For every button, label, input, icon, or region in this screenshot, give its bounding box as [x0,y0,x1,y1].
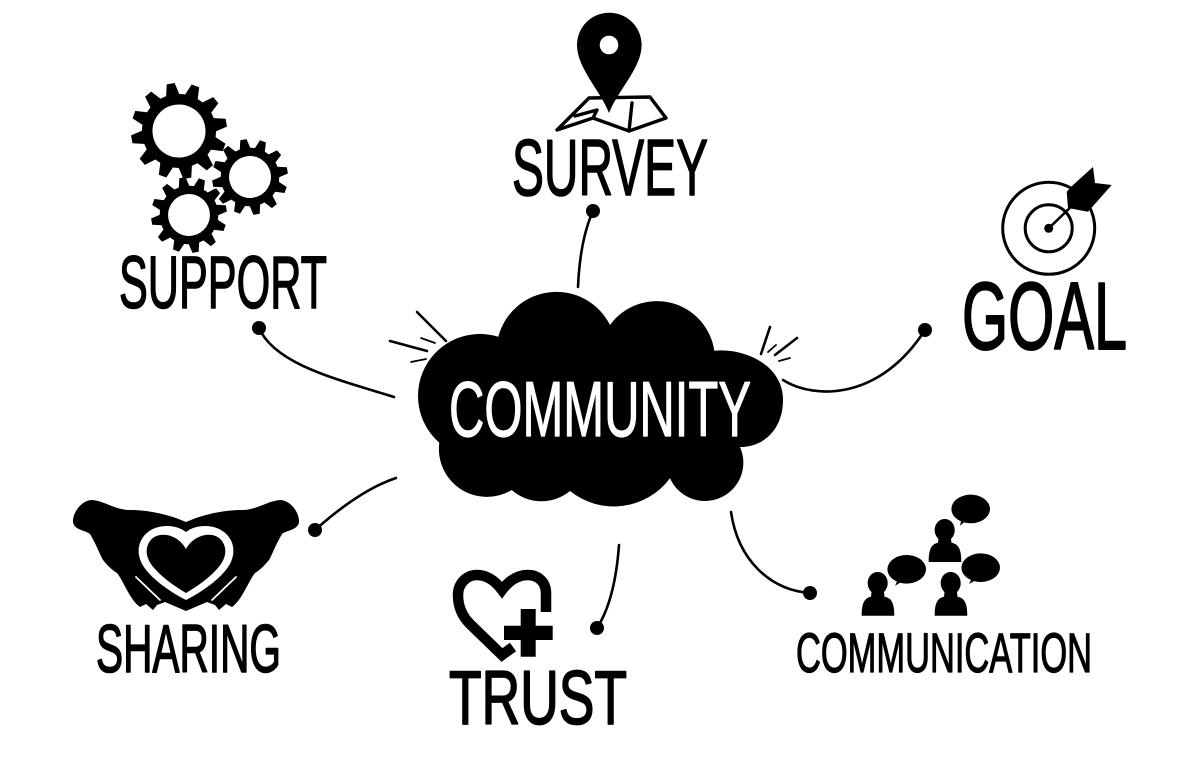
person: right [935,572,967,616]
title: community: COMMUNITY [449,365,751,453]
label: trust: TRUST [449,656,627,741]
rays: right [761,327,797,361]
rays: left [390,312,446,362]
person: left [862,572,894,616]
cloud shape [418,292,783,506]
icon: target [1003,167,1112,274]
gear: large [123,75,235,187]
label: survey: SURVEY [512,123,708,212]
speech bubble: top [951,495,990,526]
node: survey [512,13,708,287]
gear: right [206,133,294,221]
person: top [929,519,961,562]
heart outline [458,575,546,655]
finger slits [136,577,236,600]
node: trust [449,545,627,741]
connector: support [252,321,394,397]
node: support [119,75,394,397]
icon: people with speech bubbles [862,495,1000,616]
node: communication [731,495,1092,684]
gear: bottom [145,171,233,259]
connector: sharing [308,478,396,537]
heart outline [139,526,233,600]
label: support: SUPPORT [119,241,327,324]
icon: location pin [577,13,642,113]
node: sharing [73,478,396,687]
connector: communication [731,512,817,600]
connector: trust [590,545,619,635]
speech bubble: right [961,553,1000,584]
cross [504,609,553,657]
hands [73,500,299,611]
icon: map [557,97,666,131]
central cloud: community [390,292,797,506]
speech bubble: left [887,555,926,586]
label: sharing: SHARING [96,611,281,687]
connector: survey [578,204,600,287]
icon: heart with cross [458,575,553,657]
icon: hands with heart [73,500,299,611]
icon: arrow fletching [1067,167,1112,212]
connector: goal [783,323,932,392]
node: goal [783,167,1127,392]
heart [147,535,225,593]
icon: gears [123,75,294,259]
